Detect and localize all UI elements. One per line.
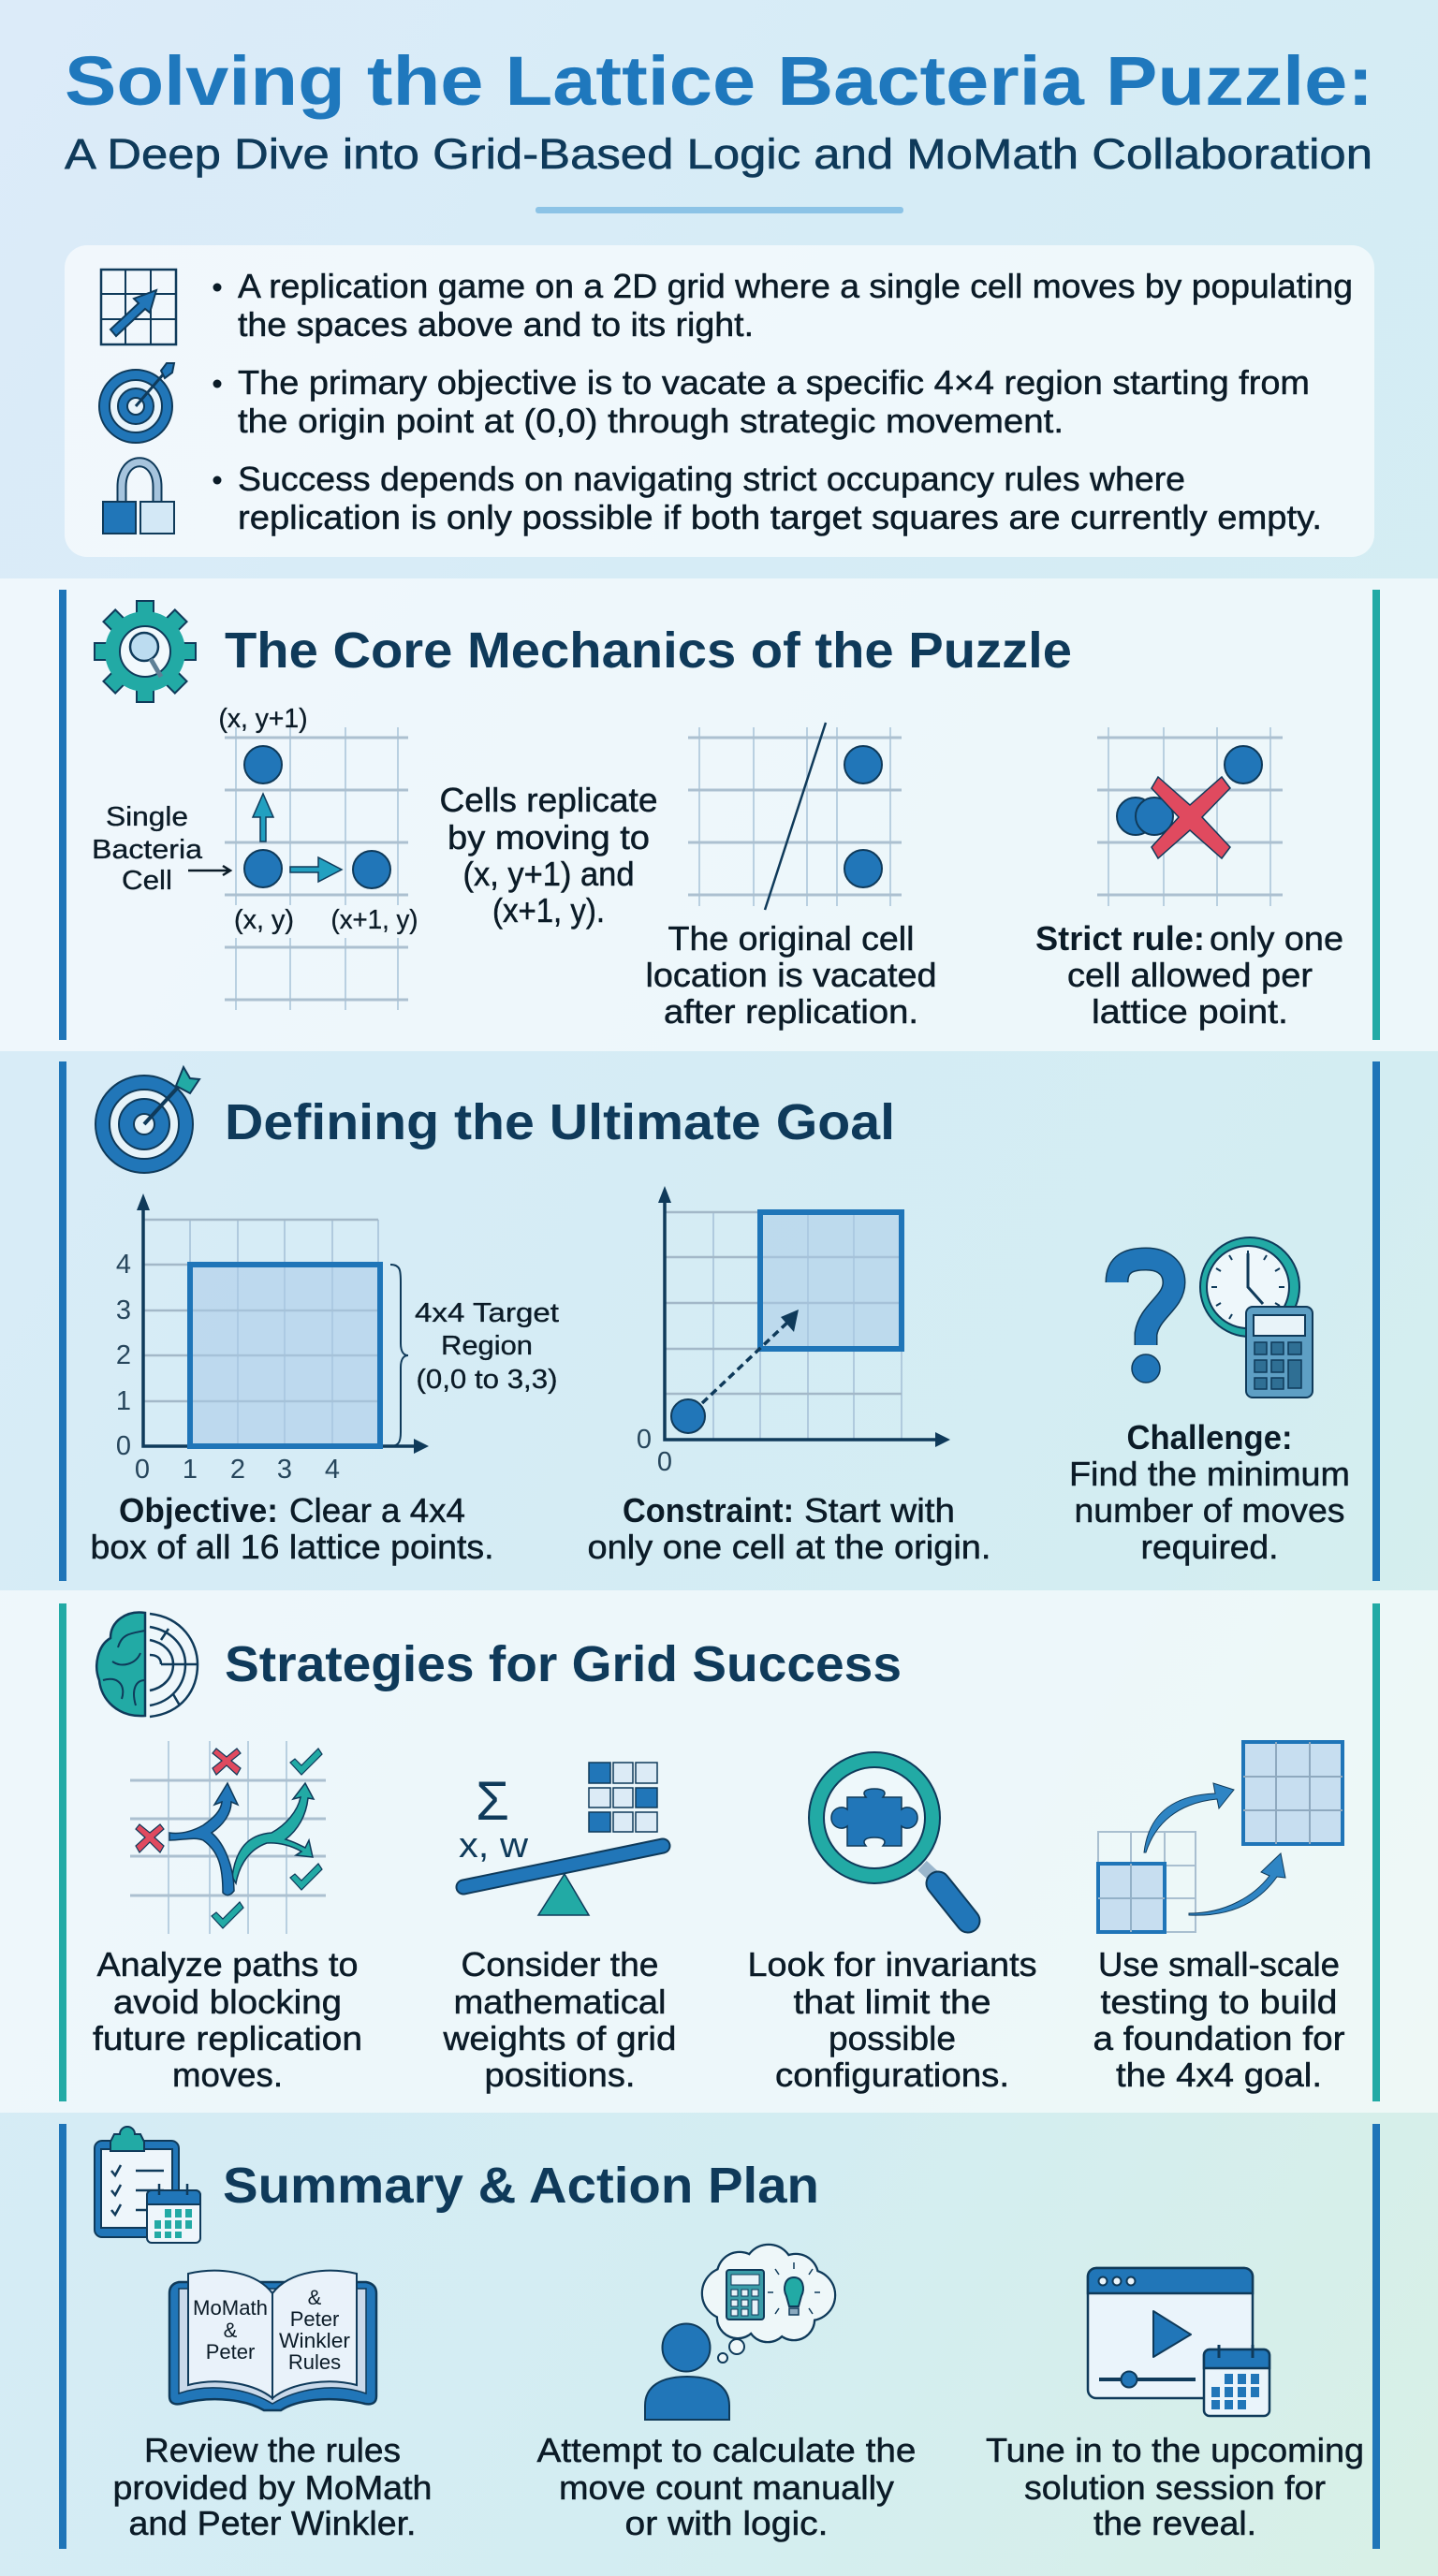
icon: small grid scaling up <box>1098 1742 1343 1932</box>
icon: balance with weights: Σ <box>476 1771 509 1832</box>
chart: 4x4 target region: 3 <box>277 1455 292 1485</box>
chart: start at origin: 0 <box>637 1425 652 1455</box>
text: strict rule: Strict rule: <box>1035 919 1205 958</box>
icon: red cross <box>1152 777 1230 858</box>
icon: balance with weights: x, w <box>459 1826 529 1866</box>
text: cells replicate: Cells replicate <box>440 781 657 819</box>
icon: magnifier with puzzle piece <box>809 1752 968 1921</box>
text: objective: Clear a 4x4 <box>289 1491 465 1530</box>
heading: strategies: Strategies for Grid Success <box>225 1636 902 1692</box>
text: challenge: Challenge: <box>1127 1418 1292 1456</box>
chart: 4x4 target region: 2 <box>230 1455 245 1485</box>
panel: introduction <box>65 245 1374 557</box>
text: cells replicate: (x, y+1) and <box>462 855 635 893</box>
text: invariants <box>747 1945 1037 2094</box>
icon: open rule book: Peter <box>206 2340 255 2364</box>
icon: open rule book: Rules <box>288 2350 341 2374</box>
text: constraint <box>588 1491 990 1566</box>
text: objective <box>90 1491 494 1566</box>
icon: target <box>99 363 174 443</box>
text: review rules <box>112 2431 433 2542</box>
chart: 4x4 target region: 4 <box>116 1250 131 1280</box>
chart: 4x4 target region: 0 <box>116 1431 131 1461</box>
diagram: replication grid: Cell <box>122 866 172 896</box>
text: small-scale testing: testing to build <box>1101 1983 1337 2021</box>
text: original cell: The original cell <box>668 919 914 958</box>
text: constraint: Constraint: <box>623 1491 794 1530</box>
text: invariants: possible <box>829 2019 956 2057</box>
text: cells replicate: by moving to <box>448 818 650 856</box>
text: strict rule: cell allowed per <box>1067 956 1313 994</box>
text: review rules: and Peter Winkler. <box>129 2504 416 2542</box>
text: analyze paths <box>93 1945 362 2094</box>
text: cells replicate <box>440 781 657 929</box>
chart: start at origin: 0 <box>657 1447 672 1477</box>
icon: open rule book: Peter <box>290 2307 339 2331</box>
text: attempt calculation <box>537 2431 916 2542</box>
diagram: replication grid: Bacteria <box>92 835 203 865</box>
diagram: replication grid: (x+1, y) <box>331 905 418 935</box>
icon: open rule book: Winkler <box>279 2329 350 2352</box>
bullet list: the spaces above and to its right. <box>238 305 754 344</box>
text: original cell: after replication. <box>664 992 918 1031</box>
diagram: replication grid: Single <box>106 802 188 832</box>
text: tune in: solution session for <box>1024 2468 1326 2507</box>
text: small-scale testing: a foundation for <box>1093 2019 1344 2057</box>
text: challenge: Find the minimum <box>1069 1455 1350 1493</box>
heading: summary: Summary & Action Plan <box>223 2158 819 2214</box>
text: mathematical weights: Consider the <box>461 1945 659 1983</box>
text: mathematical weights: positions. <box>485 2056 635 2094</box>
text: constraint: only one cell at the origin. <box>588 1528 990 1566</box>
text: objective: box of all 16 lattice points. <box>90 1528 494 1566</box>
panel: core mechanics <box>59 590 1380 1040</box>
diagram: occupied lattice point <box>1097 727 1283 906</box>
icon: teal checks <box>212 1749 322 1928</box>
icon: open rule book: MoMath <box>193 2296 268 2320</box>
bullet list: The primary objective is to vacate a specific 4×4 region starting from <box>238 363 1310 402</box>
icon: video player with calendar <box>1088 2268 1269 2416</box>
icon: open rule book <box>169 2271 376 2410</box>
icon: gear with magnifier <box>95 601 196 702</box>
text: tune in: Tune in to the upcoming <box>986 2431 1364 2469</box>
icon: person thinking <box>645 2245 835 2420</box>
icon: grid with arrow <box>101 270 176 344</box>
text: original cell <box>646 919 936 1031</box>
chart: 4x4 target region: 1 <box>116 1386 131 1416</box>
chart: 4x4 target region: (0,0 to 3,3) <box>416 1365 558 1395</box>
arrow: teal branches <box>232 1783 314 1883</box>
chart: 4x4 target region: 4x4 Target <box>415 1298 559 1328</box>
bullet list: Success depends on navigating strict occupancy rules where <box>238 460 1185 498</box>
text: mathematical weights: mathematical <box>453 1983 667 2021</box>
arrow: blue branches <box>169 1783 238 1895</box>
arrow: small to large lower <box>1189 1853 1285 1915</box>
arrow: cell pointer <box>188 866 230 875</box>
icon: open rule book: & <box>308 2286 322 2309</box>
diagram: path analysis <box>130 1741 326 1934</box>
text: invariants: configurations. <box>775 2056 1009 2094</box>
arrow: dotted path to target <box>702 1310 799 1403</box>
text: review rules: provided by MoMath <box>112 2468 433 2507</box>
icon: target with arrow <box>95 1067 199 1173</box>
text: tune in: the reveal. <box>1093 2504 1256 2542</box>
diagram: vacated origin <box>688 723 902 910</box>
text: analyze paths: avoid blocking <box>113 1983 342 2021</box>
text: mathematical weights <box>442 1945 676 2094</box>
text: objective: Objective: <box>119 1491 278 1530</box>
text: small-scale testing: Use small-scale <box>1098 1945 1340 1983</box>
text: challenge: required. <box>1140 1528 1279 1566</box>
bullet list: replication is only possible if both target squares are currently empty. <box>238 498 1322 536</box>
subtitle: A Deep Dive into Grid-Based Logic and MoMath Collaboration <box>65 130 1372 178</box>
text: invariants: that limit the <box>794 1983 990 2021</box>
text: attempt calculation: move count manually <box>559 2468 894 2507</box>
text: analyze paths: future replication <box>93 2019 362 2057</box>
text: challenge: number of moves <box>1075 1491 1344 1530</box>
text: tune in <box>986 2431 1364 2542</box>
diagram: replication grid <box>92 704 418 1010</box>
bullet list: the origin point at (0,0) through strategic movement. <box>238 402 1064 440</box>
text: challenge <box>1069 1418 1350 1566</box>
icon: brain and maze <box>96 1613 198 1717</box>
chart: 4x4 target region: 3 <box>116 1295 131 1325</box>
text: analyze paths: moves. <box>172 2056 283 2094</box>
heading: core mechanics: The Core Mechanics of the Puzzle <box>225 622 1072 679</box>
arrow: right replication <box>290 857 342 882</box>
text: constraint: Start with <box>804 1491 955 1530</box>
arrow: small to large upper <box>1144 1783 1234 1852</box>
heading: ultimate goal: Defining the Ultimate Goal <box>225 1094 895 1150</box>
diagram: replication grid: (x, y) <box>234 905 294 935</box>
text: invariants: Look for invariants <box>747 1945 1037 1983</box>
text: strict rule: only one <box>1210 919 1343 958</box>
panel: ultimate goal <box>59 1061 1380 1581</box>
text: review rules: Review the rules <box>144 2431 401 2469</box>
chart: 4x4 target region: Region <box>441 1331 533 1361</box>
text: small-scale testing <box>1093 1945 1344 2094</box>
text: original cell: location is vacated <box>646 956 936 994</box>
text: strict rule <box>1035 919 1343 1031</box>
text: attempt calculation: Attempt to calculate the <box>537 2431 916 2469</box>
text: analyze paths: Analyze paths to <box>97 1945 358 1983</box>
arrow: up replication <box>253 794 273 842</box>
chart: 4x4 target region: 4 <box>325 1455 340 1485</box>
icon: balance with weights <box>459 1763 663 1915</box>
title: Solving the Lattice Bacteria Puzzle: <box>65 42 1373 120</box>
text: small-scale testing: the 4x4 goal. <box>1116 2056 1322 2094</box>
icon: question, clock and calculator <box>1117 1237 1313 1398</box>
chart: 4x4 target region: 0 <box>135 1455 150 1485</box>
text: attempt calculation: or with logic. <box>625 2504 828 2542</box>
text: cells replicate: (x+1, y). <box>492 891 605 929</box>
bullet list: A replication game on a 2D grid where a single cell moves by populating <box>238 267 1353 305</box>
panel: summary and action plan <box>59 2124 1380 2549</box>
chart: 4x4 target region: 2 <box>116 1340 131 1370</box>
chart: start at origin <box>637 1186 950 1477</box>
diagram: replication grid: (x, y+1) <box>219 704 307 734</box>
icon: clipboard with calendar <box>95 2127 200 2243</box>
panel: strategies <box>59 1603 1380 2101</box>
bullet list <box>213 267 1353 536</box>
icon: red x marks <box>136 1749 241 1852</box>
chart: 4x4 target region: 1 <box>183 1455 198 1485</box>
chart: 4x4 target region <box>116 1193 559 1485</box>
text: mathematical weights: weights of grid <box>442 2019 676 2057</box>
text: strict rule: lattice point. <box>1092 992 1288 1031</box>
title divider <box>536 207 903 213</box>
icon: open rule book: & <box>224 2319 238 2342</box>
icon: padlock squares <box>103 462 174 534</box>
